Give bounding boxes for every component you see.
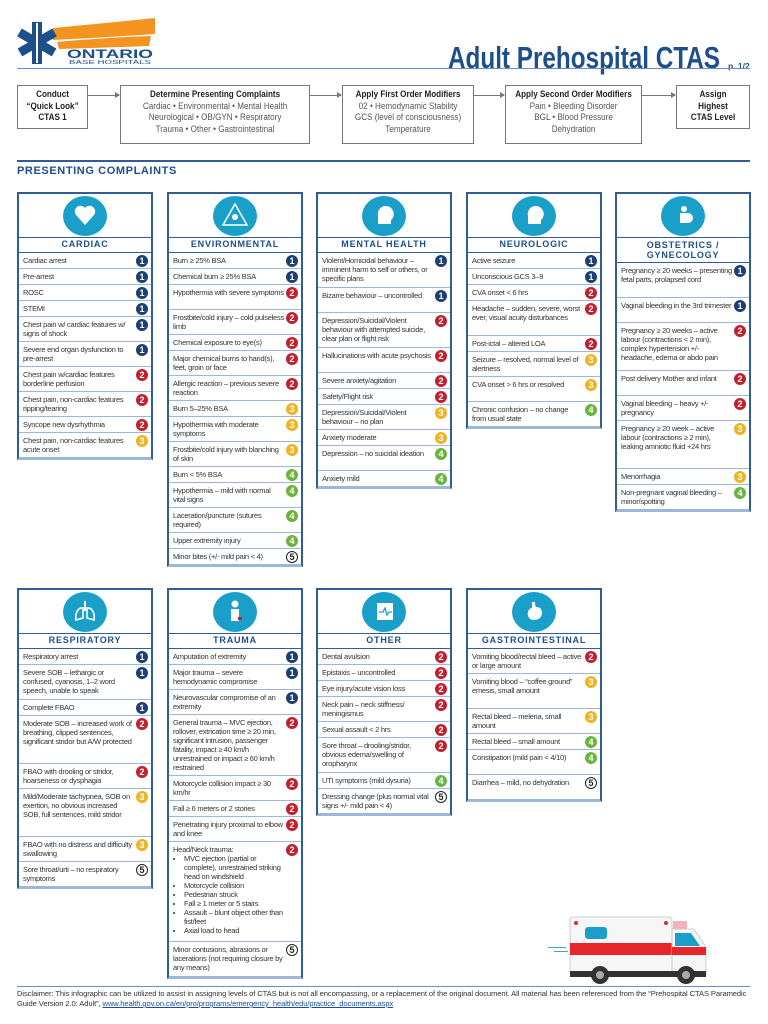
panel: mental health: 1 [438, 256, 444, 266]
panel: other: 2 [438, 725, 444, 735]
step 2: Trauma • Other • Gastrointestinal [156, 124, 274, 134]
panel: environmental: Minor bites (+/- mild pain < 4) [173, 552, 263, 561]
panel: gastrointestinal [466, 588, 602, 802]
panel: environmental: Chemical burn ≥ 25% BSA [173, 272, 256, 281]
panel: neurologic: NEUROLOGIC [499, 239, 568, 249]
panel: cardiac: 3 [139, 436, 144, 446]
panel: other: Eye injury/acute vision loss [322, 684, 405, 693]
panel: environmental: Frostbite/cold injury with blanching of skin [173, 445, 279, 463]
panel: respiratory: Respiratory arrest [23, 652, 78, 661]
panel: respiratory: Severe SOB – lethargic or confused, cyanosis, 1–2 word speech, unable to speak [23, 668, 115, 695]
panel: environmental: Upper extremity injury [173, 536, 240, 545]
panel: gastrointestinal: 4 [588, 753, 594, 763]
panel: environmental: Burn < 5% BSA [173, 470, 222, 479]
panel: obstetrics: Pregnancy ≥ 20 weeks – presenting fetal parts, prolapsed cord [621, 266, 732, 284]
panel: other: 5 [438, 792, 444, 802]
panel: respiratory: 1 [139, 668, 144, 678]
panel: mental health: Depression – no suicidal ideation [322, 449, 424, 458]
section heading: PRESENTING COMPLAINTS [17, 165, 177, 177]
panel: gastrointestinal: Vomiting blood – “coffee ground” emesis, small amount [472, 677, 572, 695]
panel: neurologic: Seizure – resolved, normal level of alertness [472, 355, 578, 373]
panel: neurologic: 3 [588, 380, 594, 390]
panel: obstetrics: 2 [737, 374, 742, 384]
panel: gastrointestinal: GASTROINTESTINAL [482, 635, 586, 645]
panel: neurologic: CVA onset > 6 hrs or resolved [472, 380, 564, 389]
panel: cardiac: 1 [139, 345, 144, 355]
panel: trauma: Amputation of extremity [173, 652, 246, 661]
panel: environmental: Major chemical burns to hand(s), feet, groin or face [173, 354, 274, 372]
panel: gastrointestinal: Constipation (mild pain < 4/10) [472, 753, 566, 762]
panel: obstetrics: Menorrhagia [621, 472, 660, 481]
panel: other: 2 [438, 741, 444, 751]
panel: cardiac: STEMI [23, 304, 45, 313]
panel: other: 2 [438, 668, 444, 678]
panel: neurologic [466, 192, 602, 429]
panel: mental health: Anxiety mild [322, 474, 359, 483]
panel: cardiac: Chest pain w/ cardiac features w/ signs of shock [23, 320, 125, 338]
panel: respiratory: 1 [139, 703, 144, 713]
panel: respiratory: 3 [139, 792, 144, 802]
panel: neurologic: Headache – sudden, severe, worst ever, visual acuity disturbances [472, 304, 580, 322]
panel: mental health: Anxiety moderate [322, 433, 376, 442]
panel: cardiac: Severe end organ dysfunction to pre-arrest [23, 345, 123, 363]
panel: environmental: 3 [289, 404, 294, 414]
panel: mental health: Bizarre behaviour – uncontrolled [322, 291, 422, 300]
panel: trauma: Minor contusions, abrasions or lacerations (not requiring closure by any means) [173, 945, 283, 972]
panel: cardiac [17, 192, 153, 460]
panel: gastrointestinal: 5 [588, 778, 594, 788]
panel: environmental: Hypothermia with severe symptoms [173, 288, 284, 297]
panel: trauma: 1 [289, 668, 294, 678]
logo: ONTARIO [67, 47, 153, 61]
panel: obstetrics: 3 [737, 472, 742, 482]
panel: trauma: Head/Neck trauma: [173, 845, 233, 854]
panel: obstetrics: Pregnancy ≥ 20 week – active labour (contractions ≥ 2 min), leaking amniotic fluid +24 hrs [621, 424, 714, 451]
panel: obstetrics: Pregnancy ≥ 20 weeks – active labour (contractions < 2 min), complex hypertension +/- headache, edema or abdo pain [621, 326, 718, 362]
panel: environmental: 2 [289, 338, 294, 348]
panel: trauma: 2 [289, 718, 294, 728]
panel: gastrointestinal: Rectal bleed – melena, small amount [472, 712, 561, 730]
panel: environmental: 2 [289, 313, 294, 323]
step 2: Cardiac • Environmental • Mental Health [143, 100, 287, 110]
step 1 [17, 85, 88, 129]
panel: neurologic: 2 [588, 339, 594, 349]
panel: respiratory: 2 [139, 767, 144, 777]
step 2 [120, 85, 310, 144]
panel: environmental: 2 [289, 288, 294, 298]
panel: mental health: 2 [438, 351, 444, 361]
panel: other: Dressing change (plus normal vital signs +/- mild pain < 4) [322, 792, 429, 810]
panel: mental health: 4 [438, 449, 444, 459]
panel: obstetrics: GYNECOLOGY [647, 250, 719, 260]
panel: obstetrics: 3 [737, 424, 742, 434]
panel: neurologic: CVA onset < 6 hrs [472, 288, 528, 297]
panel: trauma: Axial load to head [184, 926, 239, 935]
step 5: Assign [700, 89, 727, 99]
panel: trauma: Pedestrian struck [184, 890, 238, 899]
panel: neurologic: Active seizure [472, 256, 515, 265]
panel: respiratory: Complete FBAO [23, 703, 74, 712]
panel: gastrointestinal: 4 [588, 737, 594, 747]
panel: trauma: 2 [289, 779, 294, 789]
panel: gastrointestinal: 2 [588, 652, 594, 662]
step 4 [505, 85, 642, 144]
step 4: Apply Second Order Modifiers [515, 89, 632, 99]
panel: cardiac: 2 [139, 370, 144, 380]
step 3: GCS (level of consciousness) [355, 112, 461, 122]
panel: gastrointestinal: Vomiting blood/rectal bleed – active or large amount [472, 652, 581, 670]
panel: respiratory: Moderate SOB – increased work of breathing, clipped sentences, significant stridor but A/W protected [23, 719, 132, 746]
panel: cardiac: 1 [139, 304, 144, 314]
panel: obstetrics: 1 [737, 301, 742, 311]
panel: environmental: Burn 5–25% BSA [173, 404, 228, 413]
panel: environmental: 1 [289, 256, 294, 266]
panel: environmental: 4 [289, 470, 294, 480]
panel: environmental: 4 [289, 536, 294, 546]
panel: trauma [167, 588, 303, 979]
panel: other: Epistaxis – uncontrolled [322, 668, 395, 677]
panel: gastrointestinal: 3 [588, 712, 594, 722]
step 1: “Quick Look” [26, 100, 79, 110]
title: p. 1/2 [728, 61, 750, 71]
panel: other: Sexual assault < 2 hrs [322, 725, 391, 734]
panel: environmental: 5 [289, 552, 294, 562]
panel: obstetrics: Non-pregnant vaginal bleeding – minor/spotting [621, 488, 722, 506]
panel: mental health [316, 192, 452, 489]
panel: respiratory: Sore throat/urti – no respiratory symptoms [23, 865, 119, 883]
panel: mental health: Hallucinations with acute psychosis [322, 351, 431, 360]
panel: cardiac: 1 [139, 256, 144, 266]
panel: mental health: 3 [438, 408, 444, 418]
step 5 [676, 85, 750, 129]
panel: trauma: 2 [289, 804, 294, 814]
panel: obstetrics: Vaginal bleeding – heavy +/- pregnancy [621, 399, 708, 417]
panel: cardiac: Chest pain, non-cardiac features acute onset [23, 436, 123, 454]
panel: mental health: MENTAL HEALTH [341, 239, 427, 249]
panel: cardiac: 2 [139, 395, 144, 405]
step 3: Apply First Order Modifiers [356, 89, 460, 99]
panel: mental health: 2 [438, 376, 444, 386]
panel: trauma: Assault – blunt object other than fist/feet [184, 908, 283, 926]
step 4: BGL • Blood Pressure [534, 112, 613, 122]
flow: steps [17, 85, 750, 144]
panel: respiratory: 2 [139, 719, 144, 729]
step 2: Neurological • OB/GYN • Respiratory [149, 112, 281, 122]
step 4: Pain • Bleeding Disorder [530, 100, 618, 110]
panel: environmental [167, 192, 303, 567]
step 5: CTAS Level [691, 112, 735, 122]
panel: environmental: 3 [289, 445, 294, 455]
panel: respiratory: 1 [139, 652, 144, 662]
panel: environmental: 1 [289, 272, 294, 282]
panel: cardiac: 1 [139, 320, 144, 330]
panel: respiratory: Mild/Moderate tachypnea, SOB on exertion, no obvious increased SOB, full sentences, mild stridor [23, 792, 130, 819]
panel: trauma: 1 [289, 693, 294, 703]
panel: environmental: Chemical exposure to eye(s) [173, 338, 262, 347]
panel: trauma: Fall ≥ 6 meters or 2 stories [173, 804, 255, 813]
panel: environmental: 4 [289, 486, 294, 496]
step 3: 02 • Hemodynamic Stability [359, 100, 457, 110]
step 3 [342, 85, 474, 144]
panel: gastrointestinal: Diarrhea – mild, no dehydration [472, 778, 569, 787]
panel: environmental: ENVIRONMENTAL [191, 239, 279, 249]
panel: trauma: Penetrating injury proximal to elbow and knee [173, 820, 283, 838]
panel: obstetrics: 1 [737, 266, 742, 276]
panel: cardiac: 1 [139, 288, 144, 298]
panel: environmental: Hypothermia with moderate symptoms [173, 420, 258, 438]
panel: respiratory [17, 588, 153, 889]
panel: neurologic: Post-ictal – altered LOA [472, 339, 545, 348]
panel: neurologic: Unconscious GCS 3–9 [472, 272, 543, 281]
panel: obstetrics: 2 [737, 326, 742, 336]
panel: mental health: 3 [438, 433, 444, 443]
step 1: CTAS 1 [38, 112, 67, 122]
panel: trauma: MVC ejection (partial or complete), unrestrained striking head on windshield [184, 854, 281, 881]
panel: trauma: General trauma – MVC ejection, rollover, extrication time ≥ 20 min, significant intrusion, passenger fatality, impact ≥ 40 km/h unrestrained or impact ≥ 60 km/h restrained [173, 718, 276, 772]
panel: mental health: 1 [438, 291, 444, 301]
panel: mental health: 4 [438, 474, 444, 484]
panel: other: Neck pain – neck stiffness/ meningismus [322, 700, 404, 718]
panel: trauma: Major trauma – severe hemodynamic compromise [173, 668, 257, 686]
panel: trauma: 2 [289, 845, 294, 855]
panel: environmental: 2 [289, 379, 294, 389]
panel: environmental: Allergic reaction – previous severe reaction [173, 379, 279, 397]
panel: other [316, 588, 452, 816]
panel: environmental: 3 [289, 420, 294, 430]
panel: neurologic: 1 [588, 256, 594, 266]
panel: other: 2 [438, 652, 444, 662]
panel: other: UTI symptoms (mild dysuria) [322, 776, 411, 785]
panel: respiratory: RESPIRATORY [49, 635, 121, 645]
panel: mental health: Depression/Suicidal/Violent behaviour – no plan [322, 408, 406, 426]
panel: mental health: Violent/Homicidal behaviour – imminent harm to self or others, or specific plans [322, 256, 427, 283]
panel: environmental: Frostbite/cold injury – cold pulseless limb [173, 313, 284, 331]
panel: neurologic: 1 [588, 272, 594, 282]
panel: cardiac: 2 [139, 420, 144, 430]
panel: trauma: 1 [289, 652, 294, 662]
panel: neurologic: 2 [588, 288, 594, 298]
panel: other: 2 [438, 700, 444, 710]
step 4: Dehydration [552, 124, 595, 134]
panel: neurologic: Chronic confusion – no change from usual state [472, 405, 568, 423]
panel: cardiac: CARDIAC [61, 239, 109, 249]
panel: environmental: 4 [289, 511, 294, 521]
panel: environmental: Burn ≥ 25% BSA [173, 256, 226, 265]
step 5: Highest [698, 100, 728, 110]
panel: obstetrics [615, 192, 751, 512]
panel: obstetrics: 2 [737, 399, 742, 409]
step 1: Conduct [36, 89, 69, 99]
panel: cardiac: 1 [139, 272, 144, 282]
panel: mental health: Depression/Suicidal/Violent behaviour with attempted suicide, clear plan or flight risk [322, 316, 425, 343]
panel: obstetrics: Vaginal bleeding in the 3rd trimester [621, 301, 731, 310]
logo [17, 18, 155, 64]
panel: cardiac: Pre-arrest [23, 272, 54, 281]
panel: cardiac: Chest pain w/cardiac features borderline perfusion [23, 370, 115, 388]
panel: mental health: 2 [438, 316, 444, 326]
panel: cardiac: ROSC [23, 288, 44, 297]
panel: other: Sore throat – drooling/stridor, obvious edema/swelling of oropharynx [322, 741, 411, 768]
panel: other: Dental avulsion [322, 652, 370, 661]
panel: obstetrics: OBSTETRICS / [647, 240, 719, 250]
panel: environmental: Laceration/puncture (sutures required) [173, 511, 261, 529]
panel: environmental: Hypothermia – mild with normal vital signs [173, 486, 271, 504]
panel: respiratory: FBAO with no distress and difficulty swallowing [23, 840, 132, 858]
panel: other: 4 [438, 776, 444, 786]
panel: trauma: 2 [289, 820, 294, 830]
panel: other: OTHER [366, 635, 402, 645]
panel: obstetrics: Post delivery Mother and infant [621, 374, 717, 383]
panel: mental health: Severe anxiety/agitation [322, 376, 396, 385]
panel: neurologic: 3 [588, 355, 594, 365]
panel: trauma: 5 [289, 945, 294, 955]
panel: mental health: Safety/Flight risk [322, 392, 373, 401]
panel: trauma: Neurovascular compromise of an extremity [173, 693, 276, 711]
panel: cardiac: Syncope new dysrhythmia [23, 420, 105, 429]
panel: environmental: 2 [289, 354, 294, 364]
panel: trauma: Fall ≥ 1 meter or 5 stairs [184, 899, 258, 908]
panel: gastrointestinal: 3 [588, 677, 594, 687]
ambulance illustration [548, 916, 706, 984]
panel: respiratory: FBAO with drooling or stridor, hoarseness or dysphagia [23, 767, 113, 785]
panel: cardiac: Cardiac arrest [23, 256, 67, 265]
panel: gastrointestinal: Rectal bleed – small amount [472, 737, 560, 746]
disclaimer: Disclaimer: This infographic can be utilized to assist in assigning levels of CTAS but is not all encompassing, or a replacement of the original document. All material has been referenced from the “Prehospital CTAS Paramedic Guide Version 2.0: Adult”, www.health.gov.on.ca/en/pro/programs/emergency_health/edu/practice_documents.aspx [17, 989, 746, 1008]
step 3: Temperature [385, 124, 431, 134]
step 2: Determine Presenting Complaints [150, 89, 280, 99]
panel: mental health: 2 [438, 392, 444, 402]
panel: respiratory: 5 [139, 865, 144, 875]
panel: respiratory: 3 [139, 840, 144, 850]
panel: obstetrics: 4 [737, 488, 742, 498]
panel: trauma: Motorcycle collision impact ≥ 30 km/hr [173, 779, 271, 797]
panel: neurologic: 4 [588, 405, 594, 415]
panel: trauma: Motorcycle collision [184, 881, 244, 890]
panel: other: 2 [438, 684, 444, 694]
panel: trauma: TRAUMA [213, 635, 257, 645]
panel: neurologic: 2 [588, 304, 594, 314]
panel: cardiac: Chest pain, non-cardiac features ripping/tearing [23, 395, 123, 413]
